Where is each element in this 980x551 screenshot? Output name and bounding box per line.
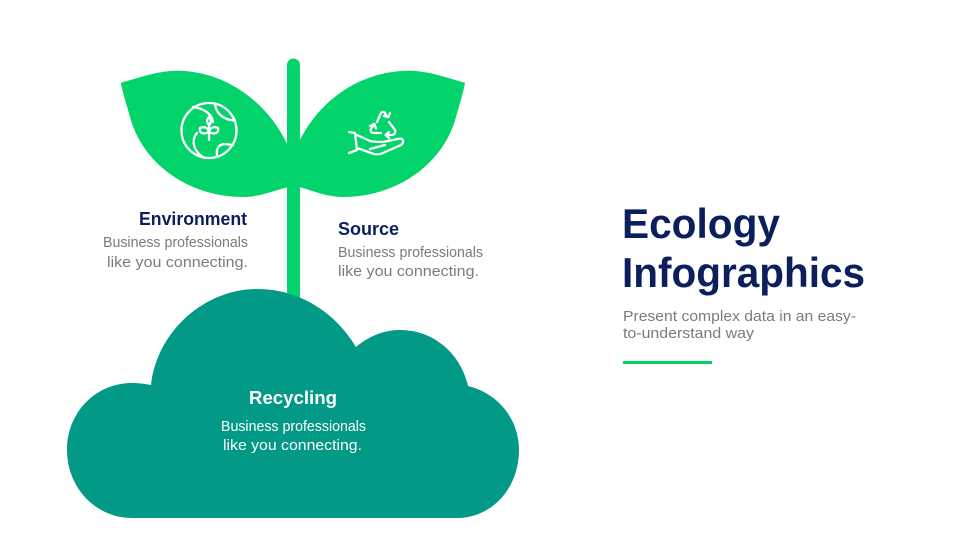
title: Ecology — [622, 200, 781, 247]
label: environment: Business professionals — [103, 235, 248, 251]
label: recycling: Business professionals — [221, 419, 366, 435]
label: recycling: Recycling — [249, 388, 337, 408]
right leaf — [299, 71, 465, 197]
label: environment: like you connecting. — [107, 255, 248, 271]
title — [622, 200, 865, 296]
label: recycling: like you connecting. — [223, 438, 362, 454]
subtitle: Present complex data in an easy- — [623, 309, 856, 325]
label: recycling — [221, 388, 366, 454]
cloud — [67, 289, 519, 518]
icon: globe with sprout — [182, 103, 236, 158]
subtitle — [623, 309, 856, 342]
label: source: like you connecting. — [338, 264, 479, 280]
label: environment — [103, 209, 248, 271]
title: Infographics — [622, 249, 865, 296]
label: environment: Environment — [139, 209, 247, 229]
plant stem — [287, 58, 300, 304]
left leaf — [121, 71, 288, 197]
accent rule — [623, 361, 712, 364]
subtitle: to-understand way — [623, 326, 755, 342]
label: source: Source — [338, 219, 399, 239]
icon: hand holding recycling symbol — [349, 112, 403, 154]
label: source: Business professionals — [338, 245, 483, 261]
label: source — [338, 219, 483, 280]
